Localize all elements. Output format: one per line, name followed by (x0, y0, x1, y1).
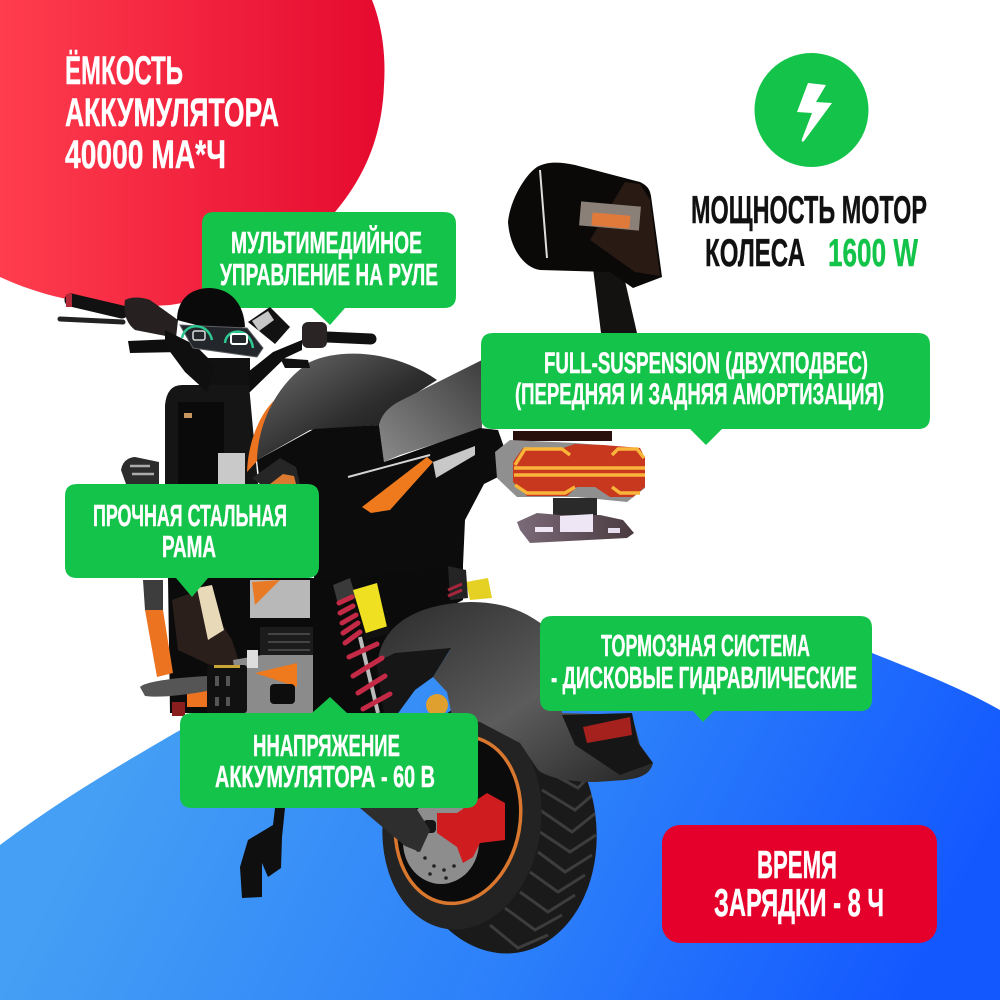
heading: motor power: 1600 W (828, 232, 918, 275)
heading: battery capacity: АККУМУЛЯТОРА (65, 91, 279, 135)
license plate holder (517, 498, 634, 543)
callout: charging time: ВРЕМЯ (757, 844, 837, 887)
heading: battery capacity (65, 49, 279, 177)
heading: motor power (691, 189, 927, 275)
fender (360, 602, 653, 852)
front body column (165, 358, 258, 484)
front seat (247, 354, 437, 472)
heading: motor power: КОЛЕСА (705, 232, 805, 275)
rear seat (379, 360, 482, 462)
footrest (140, 665, 247, 713)
icon: lightning bolt (754, 53, 868, 167)
red background blob (0, 0, 384, 306)
callout: battery voltage: ННАПРЯЖЕНИЕ (253, 728, 400, 763)
callout: steel frame: ПРОЧНАЯ СТАЛЬНАЯ (93, 498, 287, 533)
scooter illustration (60, 163, 662, 966)
amber reflector (426, 694, 448, 716)
callout: battery voltage: АККУМУЛЯТОРА - 60 В (215, 759, 435, 794)
blue background blob (0, 621, 1000, 1000)
callout: multimedia controls: МУЛЬТИМЕДИЙНОЕ (231, 224, 422, 260)
kickstand (240, 808, 285, 898)
brake disc (403, 800, 479, 884)
callout: charging time (662, 825, 937, 943)
callout: multimedia controls: УПРАВЛЕНИЕ НА РУЛЕ (220, 257, 438, 292)
lower frame and body (168, 560, 463, 713)
callout: battery voltage (180, 697, 478, 808)
frame and tail section (252, 425, 512, 580)
phone holder (248, 307, 290, 344)
callout: full suspension (481, 333, 930, 445)
red brake caliper (423, 793, 505, 863)
tyre (382, 710, 597, 954)
callout: charging time: ЗАРЯДКИ - 8 Ч (714, 882, 884, 925)
callout: steel frame: РАМА (162, 529, 216, 564)
headlight (121, 457, 159, 484)
callout: brake system (540, 616, 872, 722)
callout: brake system: ТОРМОЗНАЯ СИСТЕМА (601, 628, 810, 663)
dome cowl (177, 288, 245, 330)
heading: battery capacity: ЁМКОСТЬ (65, 49, 183, 93)
callout: multimedia controls (202, 212, 456, 325)
orange front fork (143, 580, 207, 716)
tail light (495, 431, 645, 502)
dashboard display (180, 325, 263, 357)
heading: battery capacity: 40000 МА*Ч (65, 133, 226, 177)
handlebar (60, 294, 371, 392)
callout: steel frame (65, 484, 319, 597)
red rear reflector (562, 713, 653, 775)
rear backrest (508, 163, 662, 333)
rear shock absorbers (333, 566, 492, 713)
